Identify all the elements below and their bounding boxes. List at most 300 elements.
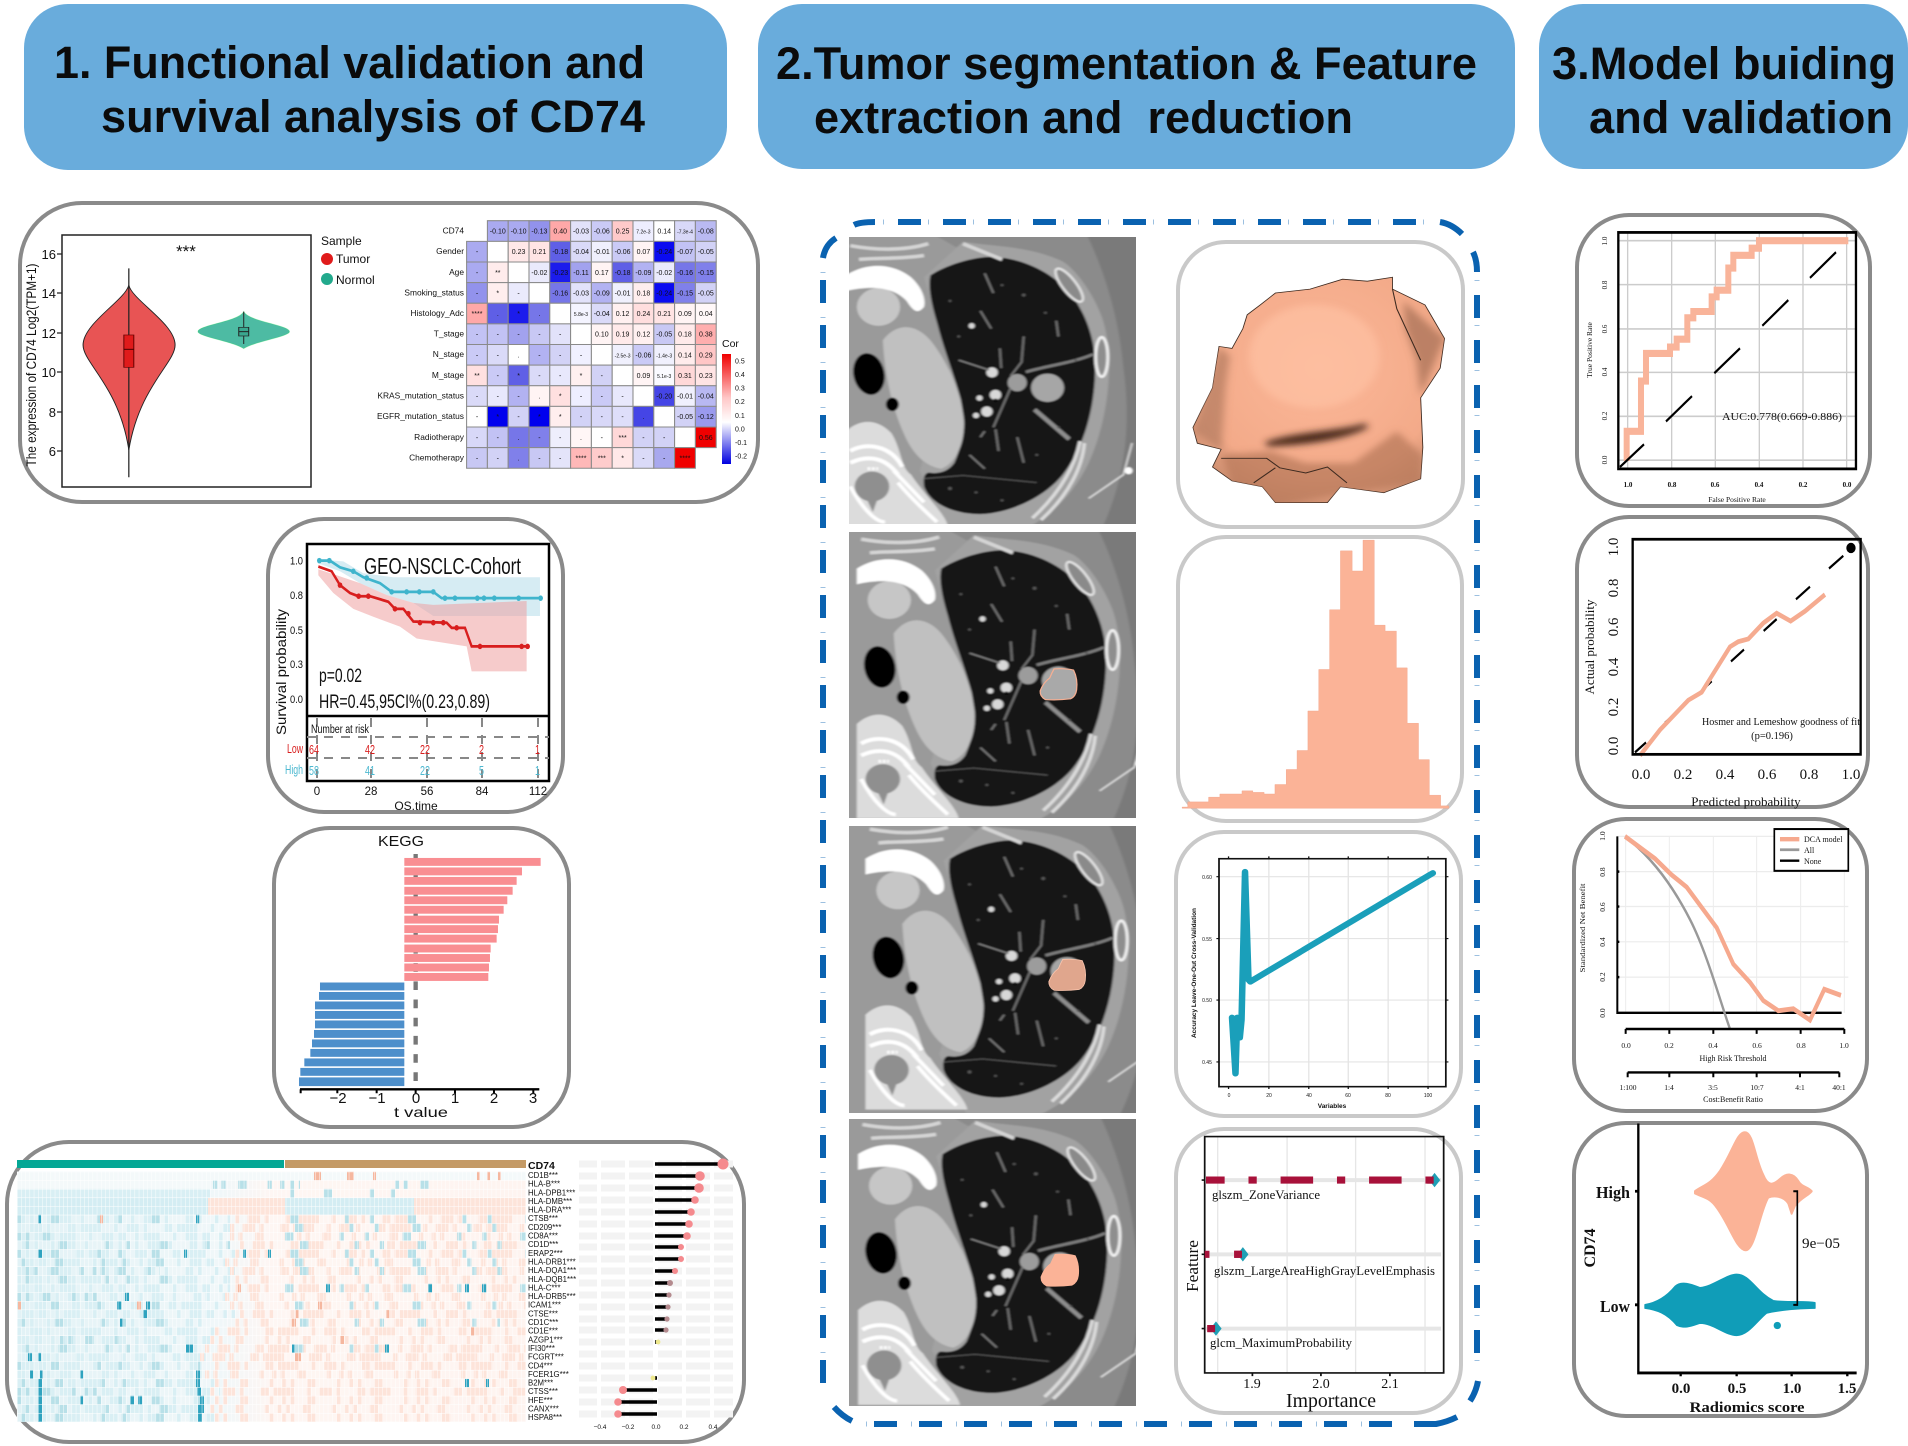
gene labels: HLA-DRB1*** [528, 1258, 576, 1266]
heatmap: clinical correlation matrix: 0.21 [657, 311, 671, 318]
panel: feature importance chart: Feature [1183, 1240, 1202, 1292]
heatmap: clinical correlation matrix: -0.06 [615, 249, 631, 256]
gene labels: CD8A*** [528, 1232, 558, 1240]
panel: recursive feature elimination line chart: 60 [1345, 1093, 1351, 1099]
gene labels [528, 1160, 576, 1422]
panel: ROC curve: 0.0 [1843, 481, 1852, 489]
panel: Kaplan-Meier survival curve: 58 [309, 763, 319, 778]
legend: correlation colour bar: -0.1 [735, 440, 747, 447]
heatmap: clinical correlation matrix: -0.02 [531, 270, 547, 277]
panel: Kaplan-Meier survival curve: 1 [535, 763, 540, 778]
heatmap: clinical correlation matrix: - [476, 249, 479, 256]
heatmap: clinical correlation matrix: - [559, 352, 562, 359]
panel: Kaplan-Meier survival curve: Low [287, 741, 303, 756]
panel: calibration curve: 0.4 [1606, 657, 1622, 676]
heatmap: clinical correlation matrix: * [517, 311, 520, 318]
heatmap: clinical correlation matrix: Chemotherapy [409, 452, 465, 462]
heatmap: clinical correlation matrix: - [559, 332, 562, 339]
panel: decision curve analysis: 0.6 [1752, 1041, 1762, 1050]
legend: correlation colour bar: 0.2 [735, 399, 745, 406]
heatmap: clinical correlation matrix: - [497, 435, 500, 442]
heatmap: clinical correlation matrix: -0.16 [677, 270, 693, 277]
heatmap: clinical correlation matrix: - [601, 394, 604, 400]
heatmap: clinical correlation matrix: - [559, 373, 562, 380]
panel: radiomics score violin plot: 9e−05 [1802, 1236, 1840, 1252]
heatmap: clinical correlation matrix: - [476, 290, 479, 297]
panel: calibration curve: Hosmer and Lemeshow goodness of fit [1702, 717, 1860, 728]
lollipop chart: correlation with CD74: 0.0 [651, 1424, 661, 1431]
heatmap: clinical correlation matrix: - [497, 455, 500, 462]
header: Model building and validation: and validation [1589, 92, 1893, 143]
heatmap: clinical correlation matrix: -0.13 [531, 228, 547, 235]
gene labels: CD74 [528, 1160, 555, 1172]
panel: decision curve analysis: 4:1 [1795, 1083, 1805, 1092]
heatmap: clinical correlation matrix: -0.03 [573, 290, 589, 297]
panel: decision curve analysis: 1:100 [1619, 1083, 1637, 1092]
heatmap: clinical correlation matrix: 5.8e-3 [574, 312, 588, 318]
heatmap: clinical correlation matrix: * [559, 414, 562, 421]
violin plot: CD74 expression: 14 [42, 286, 56, 301]
heatmap: clinical correlation matrix: -0.09 [635, 270, 651, 277]
panel: ROC curve: AUC:0.778(0.669-0.886) [1722, 411, 1842, 423]
heatmap: clinical correlation matrix: -0.01 [594, 249, 610, 256]
gene labels: HLA-C*** [528, 1283, 560, 1292]
heatmap: clinical correlation matrix: N_stage [433, 349, 464, 359]
heatmap: clinical correlation matrix: - [476, 352, 479, 359]
panel: calibration curve: 0.6 [1606, 617, 1622, 636]
heatmap: clinical correlation matrix: 0.12 [637, 332, 650, 339]
heatmap: clinical correlation matrix: - [497, 373, 500, 380]
heatmap: clinical correlation matrix: - [476, 394, 479, 400]
heatmap: clinical correlation matrix: . [580, 435, 582, 442]
panel: decision curve analysis: 1.0 [1839, 1041, 1849, 1050]
panel: recursive feature elimination line chart [1176, 832, 1461, 1116]
panel: Kaplan-Meier survival curve: OS.time [394, 799, 438, 813]
panel: Kaplan-Meier survival curve: 42 [365, 742, 375, 757]
panel: recursive feature elimination line chart: 40 [1306, 1093, 1312, 1099]
panel: intensity histogram [1178, 537, 1462, 821]
heatmap: clinical correlation matrix: . [518, 455, 520, 462]
heatmap: clinical correlation matrix: 0.23 [512, 249, 526, 256]
panel: KEGG pathway diverging bar chart: 0 [412, 1090, 420, 1107]
heatmap: clinical correlation matrix: - [497, 394, 500, 400]
panel: calibration curve: 0.0 [1606, 737, 1622, 755]
heatmap: clinical correlation matrix: - [476, 455, 479, 462]
panel: KEGG pathway diverging bar chart: 3 [529, 1090, 537, 1107]
heatmap: clinical correlation matrix: - [517, 394, 520, 400]
panel: ROC curve: 0.8 [1601, 280, 1609, 289]
panel: recursive feature elimination line chart: 20 [1266, 1093, 1272, 1099]
heatmap: clinical correlation matrix: - [538, 332, 541, 339]
panel: decision curve analysis: 0.8 [1796, 1041, 1806, 1050]
header: Functional validation and survival analysis of CD74: 1. Functional validation and [54, 37, 645, 88]
heatmap: clinical correlation matrix: **** [472, 311, 483, 318]
panel: recursive feature elimination line chart: 100 [1424, 1093, 1432, 1099]
panel: Kaplan-Meier survival curve: HR=0.45,95CI%(0.23,0.89) [319, 692, 490, 713]
legend: correlation colour bar: 0.4 [735, 372, 745, 379]
CT scan: raw slice [777, 171, 1210, 605]
heatmap: clinical correlation matrix: -0.20 [656, 394, 672, 400]
heatmap: clinical correlation matrix: - [538, 373, 541, 380]
gene labels: CANX*** [528, 1404, 559, 1414]
violin plot: CD74 expression: 12 [42, 326, 56, 341]
heatmap: clinical correlation matrix: - [517, 290, 520, 297]
panel: calibration curve: 0.2 [1606, 698, 1622, 716]
heatmap: clinical correlation matrix: 0.09 [637, 373, 650, 380]
panel: decision curve analysis: None [1804, 857, 1822, 866]
panel: radiomics score violin plot: Radiomics score [1690, 1400, 1805, 1416]
panel: ROC curve: True Positive Rate [1585, 322, 1594, 378]
violin plot: CD74 expression: 16 [42, 247, 56, 262]
panel: decision curve analysis: 0.0 [1598, 1008, 1607, 1018]
heatmap: clinical correlation matrix: - [538, 435, 541, 442]
gene labels: HSPA8*** [528, 1413, 562, 1422]
panel: radiomics score violin plot: High [1596, 1183, 1631, 1202]
heatmap: clinical correlation matrix: -0.18 [552, 249, 568, 256]
panel: decision curve analysis: 40:1 [1832, 1083, 1846, 1092]
panel: Kaplan-Meier survival curve: 56 [421, 786, 433, 798]
panel: Kaplan-Meier survival curve: 22 [420, 742, 430, 757]
gene labels: HLA-DPB1*** [528, 1188, 575, 1197]
legend: sample groups: Normol [336, 273, 375, 287]
panel: 3D tumor rendering [1178, 242, 1463, 527]
heatmap: clinical correlation matrix: * [517, 373, 520, 380]
heatmap: clinical correlation matrix: *** [619, 435, 627, 442]
heatmap: clinical correlation matrix: -0.23 [552, 270, 568, 277]
heatmap: clinical correlation matrix: 0.18 [637, 290, 650, 297]
legend: correlation colour bar: 0.3 [735, 386, 745, 392]
panel: Kaplan-Meier survival curve: 28 [365, 786, 377, 798]
panel: decision curve analysis: DCA model [1804, 835, 1843, 844]
panel: radiomics score violin plot: CD74 [1582, 1228, 1599, 1268]
header: Tumor segmentation and feature extraction: extraction and reduction [814, 92, 1353, 143]
heatmap: clinical correlation matrix: 0.56 [699, 435, 713, 442]
header: Tumor segmentation and feature extraction: 2.Tumor segmentation & Feature [776, 38, 1477, 89]
heatmap: clinical correlation matrix: -0.24 [656, 249, 672, 256]
heatmap: clinical correlation matrix: Histology_Adc [410, 308, 464, 318]
panel: Kaplan-Meier survival curve: 64 [309, 742, 319, 757]
panel: decision curve analysis: 0.2 [1598, 972, 1607, 982]
gene labels: HLA-DQA1*** [528, 1266, 576, 1275]
panel: CD74 expression violin and clinical correlation heatmap [20, 203, 758, 502]
panel: decision curve analysis: Cost:Benefit Ratio [1703, 1095, 1763, 1104]
panel: radiomics score violin plot: Low [1600, 1297, 1631, 1316]
heatmap: clinical correlation matrix: -0.08 [698, 228, 714, 235]
heatmap: clinical correlation matrix: -0.18 [615, 270, 631, 277]
panel: KEGG pathway diverging bar chart: KEGG [378, 834, 424, 850]
heatmap: clinical correlation matrix [377, 221, 716, 468]
lollipop chart: correlation with CD74 [579, 1158, 733, 1431]
lollipop chart: correlation with CD74: 0.4 [708, 1424, 718, 1431]
panel: recursive feature elimination line chart: 0.60 [1202, 875, 1212, 881]
panel: feature importance chart: glcm_MaximumProbability [1210, 1335, 1352, 1350]
heatmap: clinical correlation matrix: -0.10 [511, 228, 527, 235]
panel: recursive feature elimination line chart: 80 [1385, 1093, 1391, 1099]
heatmap: clinical correlation matrix: - [663, 455, 666, 462]
heatmap: clinical correlation matrix: -0.03 [573, 228, 589, 235]
gene labels: CTSS*** [528, 1387, 558, 1396]
panel: Kaplan-Meier survival curve: 84 [476, 786, 489, 798]
heatmap: clinical correlation matrix: . [518, 435, 520, 442]
panel: decision curve analysis: 1:4 [1664, 1083, 1674, 1092]
lollipop chart: correlation with CD74: −0.2 [622, 1424, 635, 1431]
panel: Kaplan-Meier survival curve: 22 [420, 763, 430, 778]
panel: calibration curve: Predicted probability [1691, 794, 1801, 809]
heatmap: clinical correlation matrix: - [580, 394, 583, 400]
panel: calibration curve: 0.8 [1800, 767, 1818, 783]
violin plot: CD74 expression: 8 [49, 405, 56, 420]
heatmap: clinical correlation matrix: - [601, 414, 604, 421]
heatmap: clinical correlation matrix: 7.2e-3 [636, 229, 651, 235]
heatmap: clinical correlation matrix: 5.1e-3 [657, 374, 672, 380]
heatmap: clinical correlation matrix: - [476, 332, 479, 339]
gene labels: CD209*** [528, 1223, 561, 1232]
gene labels: CD1C*** [528, 1318, 558, 1327]
panel: Kaplan-Meier survival curve: High [285, 762, 303, 777]
panel: decision curve analysis [1574, 819, 1867, 1111]
gene labels: FCGRT*** [528, 1353, 564, 1362]
panel: Kaplan-Meier survival curve: Number at risk [311, 724, 369, 736]
panel: KEGG pathway diverging bar chart [274, 828, 569, 1127]
panel: ROC curve: 0.4 [1601, 367, 1609, 376]
lollipop chart: correlation with CD74: −0.4 [594, 1424, 607, 1431]
heatmap: clinical correlation matrix: - [476, 414, 479, 421]
panel: calibration curve: 0.8 [1606, 579, 1622, 597]
heatmap: clinical correlation matrix: -0.05 [656, 332, 672, 339]
heatmap: clinical correlation matrix: **** [576, 455, 587, 462]
heatmap: clinical correlation matrix: - [601, 435, 604, 442]
panel: Kaplan-Meier survival curve: 0.5 [290, 625, 303, 637]
panel: feature importance chart: Importance [1286, 1390, 1376, 1412]
legend: sample groups [321, 234, 375, 287]
panel: radiomics score violin plot: 0.5 [1728, 1381, 1746, 1397]
heatmap: clinical correlation matrix: -0.06 [594, 228, 610, 235]
panel: ROC curve [1577, 215, 1870, 506]
heatmap: clinical correlation matrix: -0.10 [490, 228, 506, 235]
heatmap: clinical correlation matrix: -0.15 [677, 290, 693, 297]
panel: calibration curve: 0.6 [1758, 767, 1777, 783]
header: Functional validation and survival analysis of CD74 [24, 4, 727, 170]
panel: decision curve analysis: 10:7 [1750, 1083, 1764, 1092]
panel: calibration curve [1577, 517, 1868, 809]
legend: correlation colour bar [722, 338, 747, 464]
legend: sample groups: Sample [321, 234, 362, 248]
heatmap: clinical correlation matrix: . [518, 352, 520, 359]
gene labels: HLA-DQB1*** [528, 1275, 576, 1284]
panel: immune gene expression heatmap with lollipop chart [7, 1142, 744, 1442]
gene labels: B2M*** [528, 1379, 553, 1388]
gene labels: HLA-DMB*** [528, 1197, 572, 1206]
heatmap: clinical correlation matrix: 0.14 [657, 228, 671, 235]
heatmap: clinical correlation matrix: * [496, 414, 499, 421]
heatmap: clinical correlation matrix: -0.04 [594, 311, 610, 318]
heatmap: clinical correlation matrix: KRAS_mutation_status [377, 390, 464, 400]
panel: ROC curve: 0.6 [1601, 324, 1609, 333]
gene labels: CD1E*** [528, 1327, 558, 1336]
panel: radiomics score violin plot: 1.5 [1838, 1381, 1856, 1397]
heatmap: gene expression by CD74 group [17, 1160, 526, 1422]
heatmap: clinical correlation matrix: * [580, 373, 583, 380]
heatmap: clinical correlation matrix: 0.18 [678, 332, 692, 339]
heatmap: clinical correlation matrix: 0.40 [553, 228, 567, 235]
panel: calibration curve: 0.4 [1716, 767, 1735, 783]
dashed frame around segmentation and feature panels [823, 222, 1478, 1424]
panel: calibration curve: 1.0 [1842, 767, 1860, 783]
panel: recursive feature elimination line chart: 0.45 [1202, 1060, 1212, 1066]
heatmap: clinical correlation matrix: **** [680, 455, 691, 462]
panel: recursive feature elimination line chart: Variables [1318, 1103, 1347, 1110]
heatmap: clinical correlation matrix: Gender [436, 246, 464, 256]
heatmap: clinical correlation matrix: -0.01 [677, 394, 693, 400]
panel: feature importance chart: 1.9 [1243, 1377, 1261, 1392]
heatmap: clinical correlation matrix: - [601, 373, 604, 380]
heatmap: clinical correlation matrix: - [497, 352, 500, 359]
heatmap: clinical correlation matrix: ** [474, 373, 480, 380]
panel: decision curve analysis: 0.4 [1598, 937, 1607, 947]
heatmap: clinical correlation matrix: -0.05 [698, 249, 714, 256]
gene labels: HLA-DRA*** [528, 1206, 571, 1215]
panel: ROC curve: 0.2 [1799, 481, 1808, 489]
panel: ROC curve: False Positive Rate [1708, 495, 1766, 504]
heatmap: clinical correlation matrix: 0.25 [616, 228, 630, 235]
heatmap: clinical correlation matrix: -0.12 [698, 414, 714, 421]
heatmap: clinical correlation matrix: M_stage [432, 370, 464, 380]
panel: KEGG pathway diverging bar chart: t value [394, 1104, 448, 1120]
panel: decision curve analysis: 0.0 [1621, 1041, 1631, 1050]
panel: decision curve analysis: 3:5 [1708, 1083, 1718, 1092]
heatmap: clinical correlation matrix: . [642, 414, 644, 421]
gene labels: CTSE*** [528, 1309, 558, 1318]
panel: KEGG pathway diverging bar chart: −2 [329, 1090, 347, 1107]
panel: ROC curve: 1.0 [1601, 236, 1609, 245]
CT scan: tumor solid mask [789, 1050, 1222, 1446]
heatmap: clinical correlation matrix: - [642, 435, 645, 442]
heatmap: clinical correlation matrix: -0.05 [677, 414, 693, 421]
heatmap: clinical correlation matrix: -0.02 [656, 270, 672, 277]
heatmap: clinical correlation matrix: . [538, 311, 540, 318]
panel: ROC curve: 0.8 [1668, 481, 1677, 489]
heatmap: clinical correlation matrix: 0.29 [699, 352, 713, 359]
heatmap: clinical correlation matrix: - [580, 414, 583, 421]
panel: decision curve analysis: 1.0 [1598, 831, 1607, 841]
heatmap: clinical correlation matrix: - [517, 332, 520, 339]
panel: recursive feature elimination line chart: Accuracy Leave-One-Out Cross-Validation [1191, 908, 1198, 1038]
panel: calibration curve: Actual probability [1582, 599, 1597, 694]
heatmap: clinical correlation matrix: * [496, 290, 499, 297]
heatmap: clinical correlation matrix: . [538, 394, 540, 400]
gene labels: AZGP1*** [528, 1335, 563, 1344]
heatmap: clinical correlation matrix: 0.07 [637, 249, 650, 256]
panel: calibration curve: 0.0 [1632, 767, 1650, 783]
panel: Kaplan-Meier survival curve: 1 [535, 742, 540, 757]
heatmap: clinical correlation matrix: -0.05 [698, 290, 714, 297]
heatmap: clinical correlation matrix: - [538, 352, 541, 359]
heatmap: clinical correlation matrix: 0.38 [699, 332, 713, 339]
panel: ROC curve: 0.4 [1755, 481, 1764, 489]
heatmap: clinical correlation matrix: 0.24 [637, 311, 650, 318]
violin plot: CD74 expression [24, 235, 311, 487]
gene labels: HLA-DRB5*** [528, 1292, 576, 1301]
CT scan: tumor outlined [787, 464, 1221, 897]
header: Functional validation and survival analysis of CD74: survival analysis of CD74 [101, 91, 645, 142]
heatmap: clinical correlation matrix: 0.12 [616, 311, 630, 318]
legend: correlation colour bar: 0.0 [735, 426, 745, 434]
legend: correlation colour bar: -0.2 [735, 454, 747, 460]
heatmap: clinical correlation matrix: 0.10 [595, 332, 609, 339]
heatmap: clinical correlation matrix: 0.19 [616, 332, 630, 339]
heatmap: clinical correlation matrix: - [621, 394, 624, 400]
heatmap: clinical correlation matrix: ** [495, 270, 501, 277]
heatmap: clinical correlation matrix: - [580, 352, 583, 359]
panel: feature importance chart: glszm_ZoneVariance [1212, 1187, 1320, 1202]
panel: feature importance chart [1176, 1129, 1461, 1413]
header: Tumor segmentation and feature extraction [758, 4, 1515, 169]
heatmap: clinical correlation matrix: Age [449, 267, 464, 277]
panel: decision curve analysis: All [1804, 846, 1815, 855]
legend: correlation colour bar: Cor [722, 338, 739, 350]
heatmap: clinical correlation matrix: -0.15 [698, 270, 714, 277]
heatmap: clinical correlation matrix: - [476, 270, 479, 277]
heatmap: clinical correlation matrix: * [538, 414, 541, 421]
panel: Kaplan-Meier survival curve: 41 [365, 763, 375, 778]
gene labels: CD1D*** [528, 1240, 558, 1249]
gene labels: HFE*** [528, 1396, 553, 1405]
legend: sample groups: Tumor [336, 252, 370, 266]
panel: Kaplan-Meier survival curve: 0.8 [290, 590, 303, 602]
lollipop chart: correlation with CD74: 0.2 [679, 1424, 689, 1431]
panel: Kaplan-Meier survival curve: 0 [314, 786, 320, 798]
heatmap: clinical correlation matrix: *** [598, 455, 606, 462]
heatmap: clinical correlation matrix: -0.16 [552, 290, 568, 297]
violin plot: CD74 expression: 6 [49, 444, 56, 459]
panel: ROC curve: 0.0 [1601, 455, 1609, 464]
heatmap: clinical correlation matrix: -0.24 [656, 290, 672, 297]
panel: Kaplan-Meier survival curve: Survival probability [273, 609, 289, 735]
panel: ROC curve: 1.0 [1624, 481, 1633, 489]
heatmap: clinical correlation matrix: 0.31 [678, 373, 692, 380]
heatmap: clinical correlation matrix: -0.04 [698, 394, 714, 400]
heatmap: clinical correlation matrix: - [621, 414, 624, 421]
heatmap: clinical correlation matrix: - [559, 435, 562, 442]
panel: feature importance chart: 2.0 [1312, 1377, 1330, 1392]
panel: KEGG pathway diverging bar chart: 2 [490, 1090, 498, 1107]
violin plot: CD74 expression: 10 [42, 365, 56, 380]
header: Model building and validation: 3.Model buiding [1552, 38, 1896, 89]
heatmap: clinical correlation matrix: - [476, 435, 479, 442]
heatmap: clinical correlation matrix: . [497, 311, 499, 318]
heatmap: clinical correlation matrix: -0.06 [635, 352, 651, 359]
violin plot: CD74 expression: The expression of CD74 Log2(TPM+1) [24, 264, 39, 466]
panel: ROC curve: 0.2 [1601, 411, 1609, 420]
header: Model building and validation [1539, 4, 1908, 169]
heatmap: clinical correlation matrix: Radiotherapy [414, 432, 465, 442]
legend: correlation colour bar: 0.5 [735, 358, 745, 366]
heatmap: clinical correlation matrix: -0.04 [573, 249, 589, 256]
gene labels: ICAM1*** [528, 1301, 561, 1310]
legend: correlation colour bar: 0.1 [735, 413, 745, 420]
heatmap: clinical correlation matrix: 0.04 [699, 311, 713, 318]
panel: feature importance chart: glszm_LargeAreaHighGrayLevelEmphasis [1214, 1263, 1435, 1278]
heatmap: clinical correlation matrix: 0.17 [595, 270, 609, 277]
panel: decision curve analysis: 0.2 [1664, 1041, 1674, 1050]
heatmap: clinical correlation matrix: EGFR_mutation_status [377, 411, 464, 421]
panel: decision curve analysis: 0.4 [1708, 1041, 1718, 1050]
panel: decision curve analysis: 0.8 [1598, 867, 1607, 877]
heatmap: clinical correlation matrix: - [497, 332, 500, 339]
panel: KEGG pathway diverging bar chart: 1 [451, 1090, 459, 1107]
gene labels: ERAP2*** [528, 1249, 563, 1258]
heatmap: clinical correlation matrix: 0.09 [678, 311, 692, 318]
